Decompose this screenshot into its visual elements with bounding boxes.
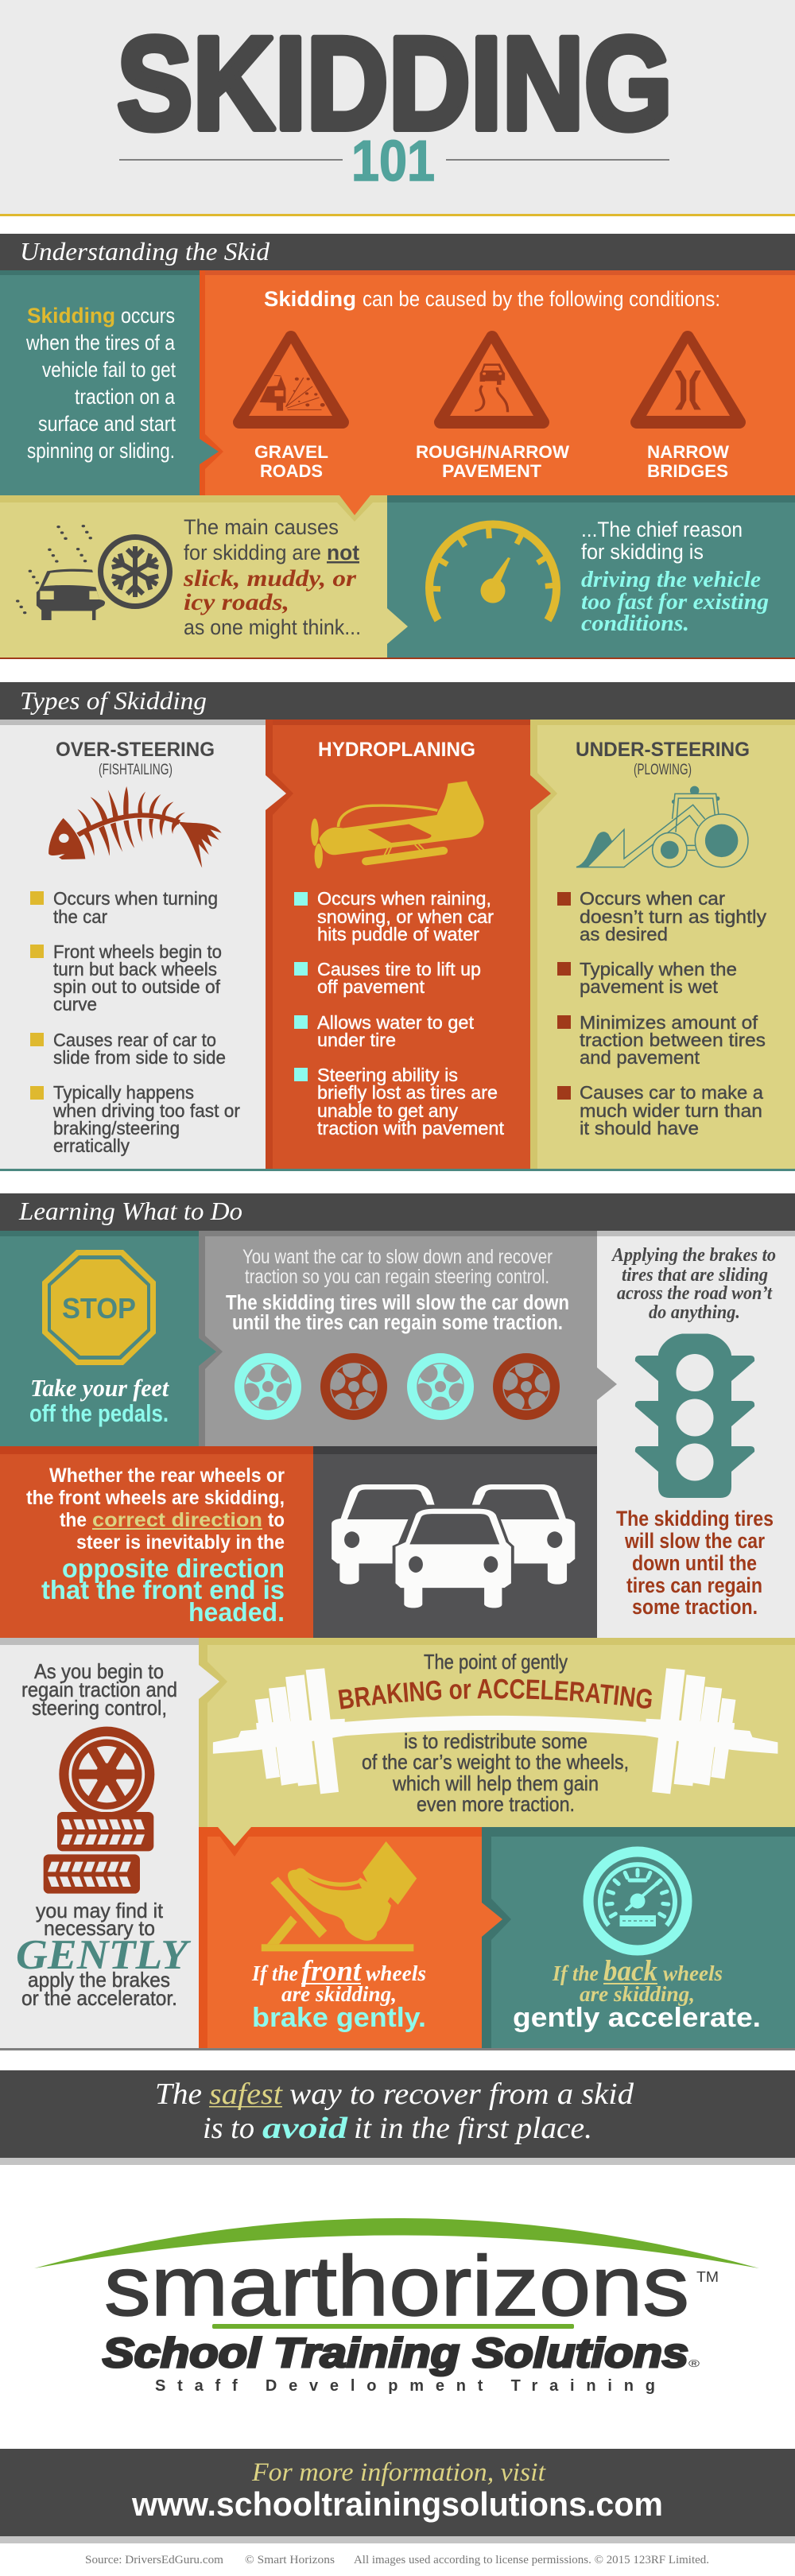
section bar: Learning What to Do: [0, 1193, 795, 1231]
panel: correct direction: steer is inevitably in the: [76, 1531, 285, 1554]
logo: smart horizons school training solutions: TM: [696, 2269, 719, 2285]
text: slow down: The skidding tires will slow the car down: [226, 1292, 569, 1314]
panel: skidding definition: surface and start: [38, 412, 176, 436]
panel: skidding conditions: [200, 270, 795, 495]
panel: skidding definition: occurs: [121, 304, 175, 328]
section bar: Learning What to Do: Learning What to Do: [18, 1197, 242, 1225]
panel: chief reason: [387, 495, 795, 658]
icon: speedometer: [429, 525, 556, 620]
text: main causes: The main causes: [184, 515, 339, 539]
text: gently accelerate: gently accelerate.: [513, 2003, 761, 2033]
text: slow down: until the tires can regain some traction.: [232, 1312, 563, 1334]
panel: skidding definition: when the tires of a: [25, 331, 176, 355]
label: gravel roads: GRAVEL: [254, 442, 328, 462]
heading: under-steering: [576, 739, 750, 778]
panel: skidding definition: [0, 270, 200, 495]
icon: foot on brake pedal: [262, 1841, 417, 1951]
bullet list: over-steering: erratically: [53, 1135, 130, 1156]
banner: safest way: is to: [203, 2112, 254, 2145]
text: point of gently: even more traction.: [417, 1792, 575, 1816]
panel: correct direction: headed.: [188, 1597, 285, 1627]
text: gently: apply the brakes: [28, 1968, 170, 1992]
logo: smart horizons school training solutions: School Training Solutions: [103, 2330, 688, 2376]
panel: hydroplaning: [266, 720, 530, 1170]
footer banner: more information: www.schooltrainingsolutions.com: [131, 2485, 663, 2523]
icon: stacked tires: [44, 1727, 154, 1894]
bullet list: over-steering: slide from side to side: [53, 1047, 226, 1068]
label: narrow bridges: [647, 442, 730, 481]
header panel with title: [0, 0, 795, 216]
label: narrow bridges: BRIDGES: [647, 461, 728, 481]
text: applying the brakes: do anything.: [649, 1302, 740, 1323]
text: as you begin: regain traction and: [21, 1678, 177, 1701]
panel: correct direction: that the front end is: [41, 1575, 285, 1604]
icon: fish skeleton: [48, 786, 222, 868]
panel: take your feet off the pedals: [0, 1231, 216, 1446]
panel: over-steering: [0, 720, 266, 1170]
text: point of gently: which will help them gain: [392, 1771, 599, 1795]
icon: wheel aqua: [240, 1358, 296, 1415]
bullet list: hydroplaning: Steering ability is: [317, 1065, 458, 1085]
text: applying the brakes: Applying the brakes to: [611, 1245, 776, 1266]
panel: brakes and traffic light: [597, 1231, 795, 1638]
text: point of gently: [339, 1650, 652, 1816]
bullet list: under-steering: Minimizes amount of: [580, 1012, 758, 1033]
panel: skidding definition: vehicle fail to get: [42, 358, 176, 382]
text: chief reason: ...The chief reason: [581, 518, 743, 541]
text: applying the brakes: [611, 1245, 776, 1323]
bullet list: under-steering: Occurs when car: [580, 888, 725, 909]
heading: under-steering: UNDER-STEERING: [576, 739, 750, 761]
bullet list: under-steering: [557, 888, 767, 1139]
text: brake gently: brake gently.: [252, 2003, 426, 2033]
source line: Source: DriversEdGuru.com: [85, 2554, 223, 2566]
text: gently accelerate: [513, 1955, 761, 2033]
icon: dashboard gauge: [588, 1852, 687, 1950]
icon: loader tractor: [576, 786, 748, 867]
text: as you begin: As you begin to: [34, 1659, 164, 1683]
bullet list: under-steering: as desired: [580, 924, 668, 945]
icon: car and snowflake: [16, 525, 170, 620]
text: main causes: [183, 515, 361, 639]
text: brake gently: front: [301, 1955, 363, 1988]
text: chief reason: driving the vehicle: [581, 568, 761, 592]
text: gently: you may find it: [36, 1899, 164, 1922]
label: rough/narrow pavement: [416, 442, 570, 481]
label: rough/narrow pavement: PAVEMENT: [442, 461, 541, 481]
panel: back wheels gently accelerate: [482, 1827, 795, 2048]
banner: safest way: The: [155, 2077, 202, 2111]
text: gently: GENTLY: [16, 1932, 192, 1978]
heading: under-steering: (PLOWING): [634, 762, 692, 778]
icon: airplane on skid: [311, 781, 484, 868]
bullet list: over-steering: Causes rear of car to: [53, 1030, 216, 1050]
bullet list: hydroplaning: hits puddle of water: [317, 924, 479, 945]
text: as you begin: steering control,: [32, 1696, 167, 1720]
heading: over-steering: [56, 739, 215, 778]
icon: narrow bridge sign: [637, 337, 739, 422]
text: point of gently: The point of gently: [424, 1650, 568, 1674]
text: chief reason: for skidding is: [581, 540, 704, 564]
text: gently accelerate: wheels: [663, 1961, 723, 1985]
bullet list: hydroplaning: off pavement: [317, 976, 425, 997]
text: brake gently: wheels: [366, 1961, 426, 1985]
footer banner: more information: [0, 2449, 795, 2543]
bullet list: hydroplaning: [294, 888, 505, 1139]
bullet list: hydroplaning: Allows water to get: [317, 1012, 475, 1033]
bullet list: over-steering: Front wheels begin to: [53, 941, 222, 962]
text: skidding tires: [616, 1507, 774, 1619]
text: point of gently: of the car’s weight to the wheels,: [362, 1750, 629, 1774]
source line: [85, 2554, 709, 2566]
text: brake gently: [251, 1955, 426, 2033]
panel: correct direction: the front wheels are skidding,: [26, 1487, 285, 1509]
title: SKIDDING: SKIDDING: [117, 10, 673, 157]
text: slow down: You want the car to slow down and recover: [242, 1246, 553, 1268]
text: gently: necessary to: [44, 1916, 155, 1940]
text: gently: [16, 1899, 192, 2010]
bullet list: over-steering: spin out to outside of: [53, 976, 221, 997]
bullet list: hydroplaning: unable to get any: [317, 1100, 458, 1121]
label: gravel roads: [254, 442, 328, 481]
text: skidding tires: tires can regain: [626, 1573, 762, 1597]
bullet list: over-steering: [30, 888, 240, 1156]
text: take your feet: [29, 1374, 169, 1427]
text: chief reason: too fast for existing: [581, 590, 769, 615]
bullet list: over-steering: the car: [53, 906, 107, 927]
text: point of gently: BRAKING or ACCELERATING: [339, 1679, 652, 1709]
text: gently accelerate: back: [603, 1955, 657, 1988]
text: skidding tires: will slow the car: [624, 1529, 765, 1553]
text: main causes: icy roads,: [184, 589, 289, 615]
text: skidding tires: down until the: [632, 1551, 757, 1575]
banner: safest way: [0, 2070, 795, 2165]
panel: main causes: [0, 495, 387, 658]
heading: hydroplaning: HYDROPLANING: [318, 739, 475, 761]
bullet list: under-steering: Causes car to make a: [580, 1082, 763, 1103]
panel: front wheels brake gently: [199, 1827, 482, 2048]
text: main causes: not: [327, 541, 359, 564]
panel: correct direction: [0, 1446, 313, 1638]
text: take your feet: off the pedals.: [29, 1399, 169, 1427]
bullet list: under-steering: and pavement: [580, 1047, 700, 1068]
icon: three cars: [332, 1484, 575, 1608]
panel: yellow point of gently braking: [199, 1638, 795, 1827]
icon: wheel rust second: [488, 1352, 561, 1425]
panel: correct direction: opposite direction: [62, 1554, 285, 1583]
panel: correct direction: the: [60, 1509, 87, 1531]
panel: gently left: [0, 1638, 199, 2048]
icon: stop sign: [42, 1250, 156, 1365]
icon: stop sign: STOP: [62, 1292, 136, 1325]
section bar: Types of Skidding: Types of Skidding: [20, 686, 207, 715]
panel: skidding definition: Skidding: [27, 304, 115, 328]
subtitle: 101: 101: [351, 130, 435, 193]
source line: © Smart Horizons: [245, 2554, 335, 2566]
bullet list: over-steering: braking/steering: [53, 1118, 180, 1139]
source line: All images used according to license permissions. © 2015 123RF Limited.: [354, 2554, 709, 2566]
banner: safest way: way to recover from a skid: [289, 2077, 634, 2111]
section bar: Types of Skidding: [0, 682, 795, 720]
bullet list: over-steering: Typically happens: [53, 1082, 194, 1103]
bullet list: under-steering: much wider turn than: [580, 1100, 762, 1121]
text: brake gently: If the: [251, 1961, 298, 1985]
heading: over-steering: OVER-STEERING: [56, 739, 215, 761]
icon: wheel aqua second: [412, 1358, 469, 1415]
label: gravel roads: ROADS: [260, 461, 323, 481]
text: applying the brakes: across the road won’t: [617, 1283, 773, 1304]
text: point of gently: is to redistribute some: [404, 1729, 588, 1753]
panel: under-steering: [530, 720, 795, 1170]
banner: safest way: safest: [209, 2077, 284, 2111]
bullet list: over-steering: Occurs when turning: [53, 888, 218, 909]
bullet list: under-steering: traction between tires: [580, 1030, 766, 1050]
text: brake gently: are skidding,: [281, 1982, 397, 2006]
icon: gravel road sign: [239, 337, 343, 422]
panel: gray slow down: [199, 1231, 597, 1446]
bullet list: over-steering: when driving too fast or: [52, 1100, 240, 1121]
text: skidding tires: some traction.: [632, 1595, 758, 1619]
bullet list: under-steering: pavement is wet: [580, 976, 719, 997]
text: chief reason: conditions.: [581, 611, 689, 636]
bullet list: hydroplaning: briefly lost as tires are: [317, 1082, 498, 1103]
bullet list: hydroplaning: Causes tire to lift up: [317, 959, 481, 980]
logo: smart horizons school training solutions: Staff Development Training: [155, 2377, 655, 2395]
panel: three cars: [313, 1446, 597, 1638]
text: main causes: for skidding are: [184, 541, 321, 564]
panel: correct direction: correct direction: [92, 1509, 262, 1531]
panel: skidding definition: spinning or sliding.: [27, 439, 175, 463]
icon: rough pavement sign: [440, 337, 543, 422]
bullet list: over-steering: curve: [53, 994, 97, 1014]
icon: barbell: [213, 1668, 778, 1794]
bullet list: under-steering: Typically when the: [580, 959, 737, 980]
text: main causes: as one might think...: [184, 615, 361, 639]
banner: safest way: avoid: [262, 2112, 348, 2145]
text: take your feet: Take your feet: [30, 1374, 169, 1402]
text: slow down: [226, 1246, 569, 1334]
panel: correct direction: to: [268, 1509, 285, 1531]
panel: skidding conditions: Skidding: [264, 287, 356, 311]
bullet list: under-steering: doesn’t turn as tightly: [580, 906, 767, 927]
panel: skidding conditions: can be caused by the following conditions:: [363, 287, 720, 311]
text: skidding tires: The skidding tires: [616, 1507, 774, 1530]
bullet list: hydroplaning: Occurs when raining,: [317, 888, 491, 909]
panel: skidding definition: traction on a: [75, 385, 176, 409]
icon: traffic light: [635, 1334, 754, 1498]
bullet list: over-steering: turn but back wheels: [53, 959, 217, 980]
text: as you begin: [21, 1659, 177, 1720]
logo: smart horizons school training solutions: smarthorizons: [104, 2238, 689, 2334]
text: gently accelerate: are skidding,: [580, 1982, 695, 2006]
text: slow down: traction so you can regain steering control.: [245, 1266, 549, 1288]
logo: smart horizons school training solutions: [34, 2218, 759, 2395]
label: narrow bridges: NARROW: [647, 442, 730, 462]
label: rough/narrow pavement: ROUGH/NARROW: [416, 442, 570, 462]
banner: safest way: it in the first place.: [354, 2112, 592, 2145]
bullet list: hydroplaning: traction with pavement: [317, 1118, 505, 1139]
section bar: Understanding the Skid: Understanding the Skid: [20, 237, 270, 266]
footer banner: more information: For more information, visit: [251, 2458, 546, 2487]
bullet list: hydroplaning: under tire: [317, 1030, 396, 1050]
logo: smart horizons school training solutions: ®: [688, 2357, 700, 2369]
bullet list: hydroplaning: snowing, or when car: [317, 906, 494, 927]
icon: wheel rust: [316, 1352, 389, 1425]
section bar: Understanding the Skid: [0, 234, 795, 270]
text: main causes: slick, muddy, or: [183, 565, 356, 592]
text: chief reason: [581, 518, 769, 636]
bullet list: under-steering: it should have: [580, 1118, 699, 1139]
panel: correct direction: Whether the rear wheels or: [49, 1465, 285, 1487]
text: applying the brakes: tires that are sliding: [622, 1265, 768, 1286]
heading: over-steering: (FISHTAILING): [99, 762, 173, 778]
text: gently: or the accelerator.: [21, 1986, 177, 2010]
text: gently accelerate: If the: [552, 1961, 599, 1985]
